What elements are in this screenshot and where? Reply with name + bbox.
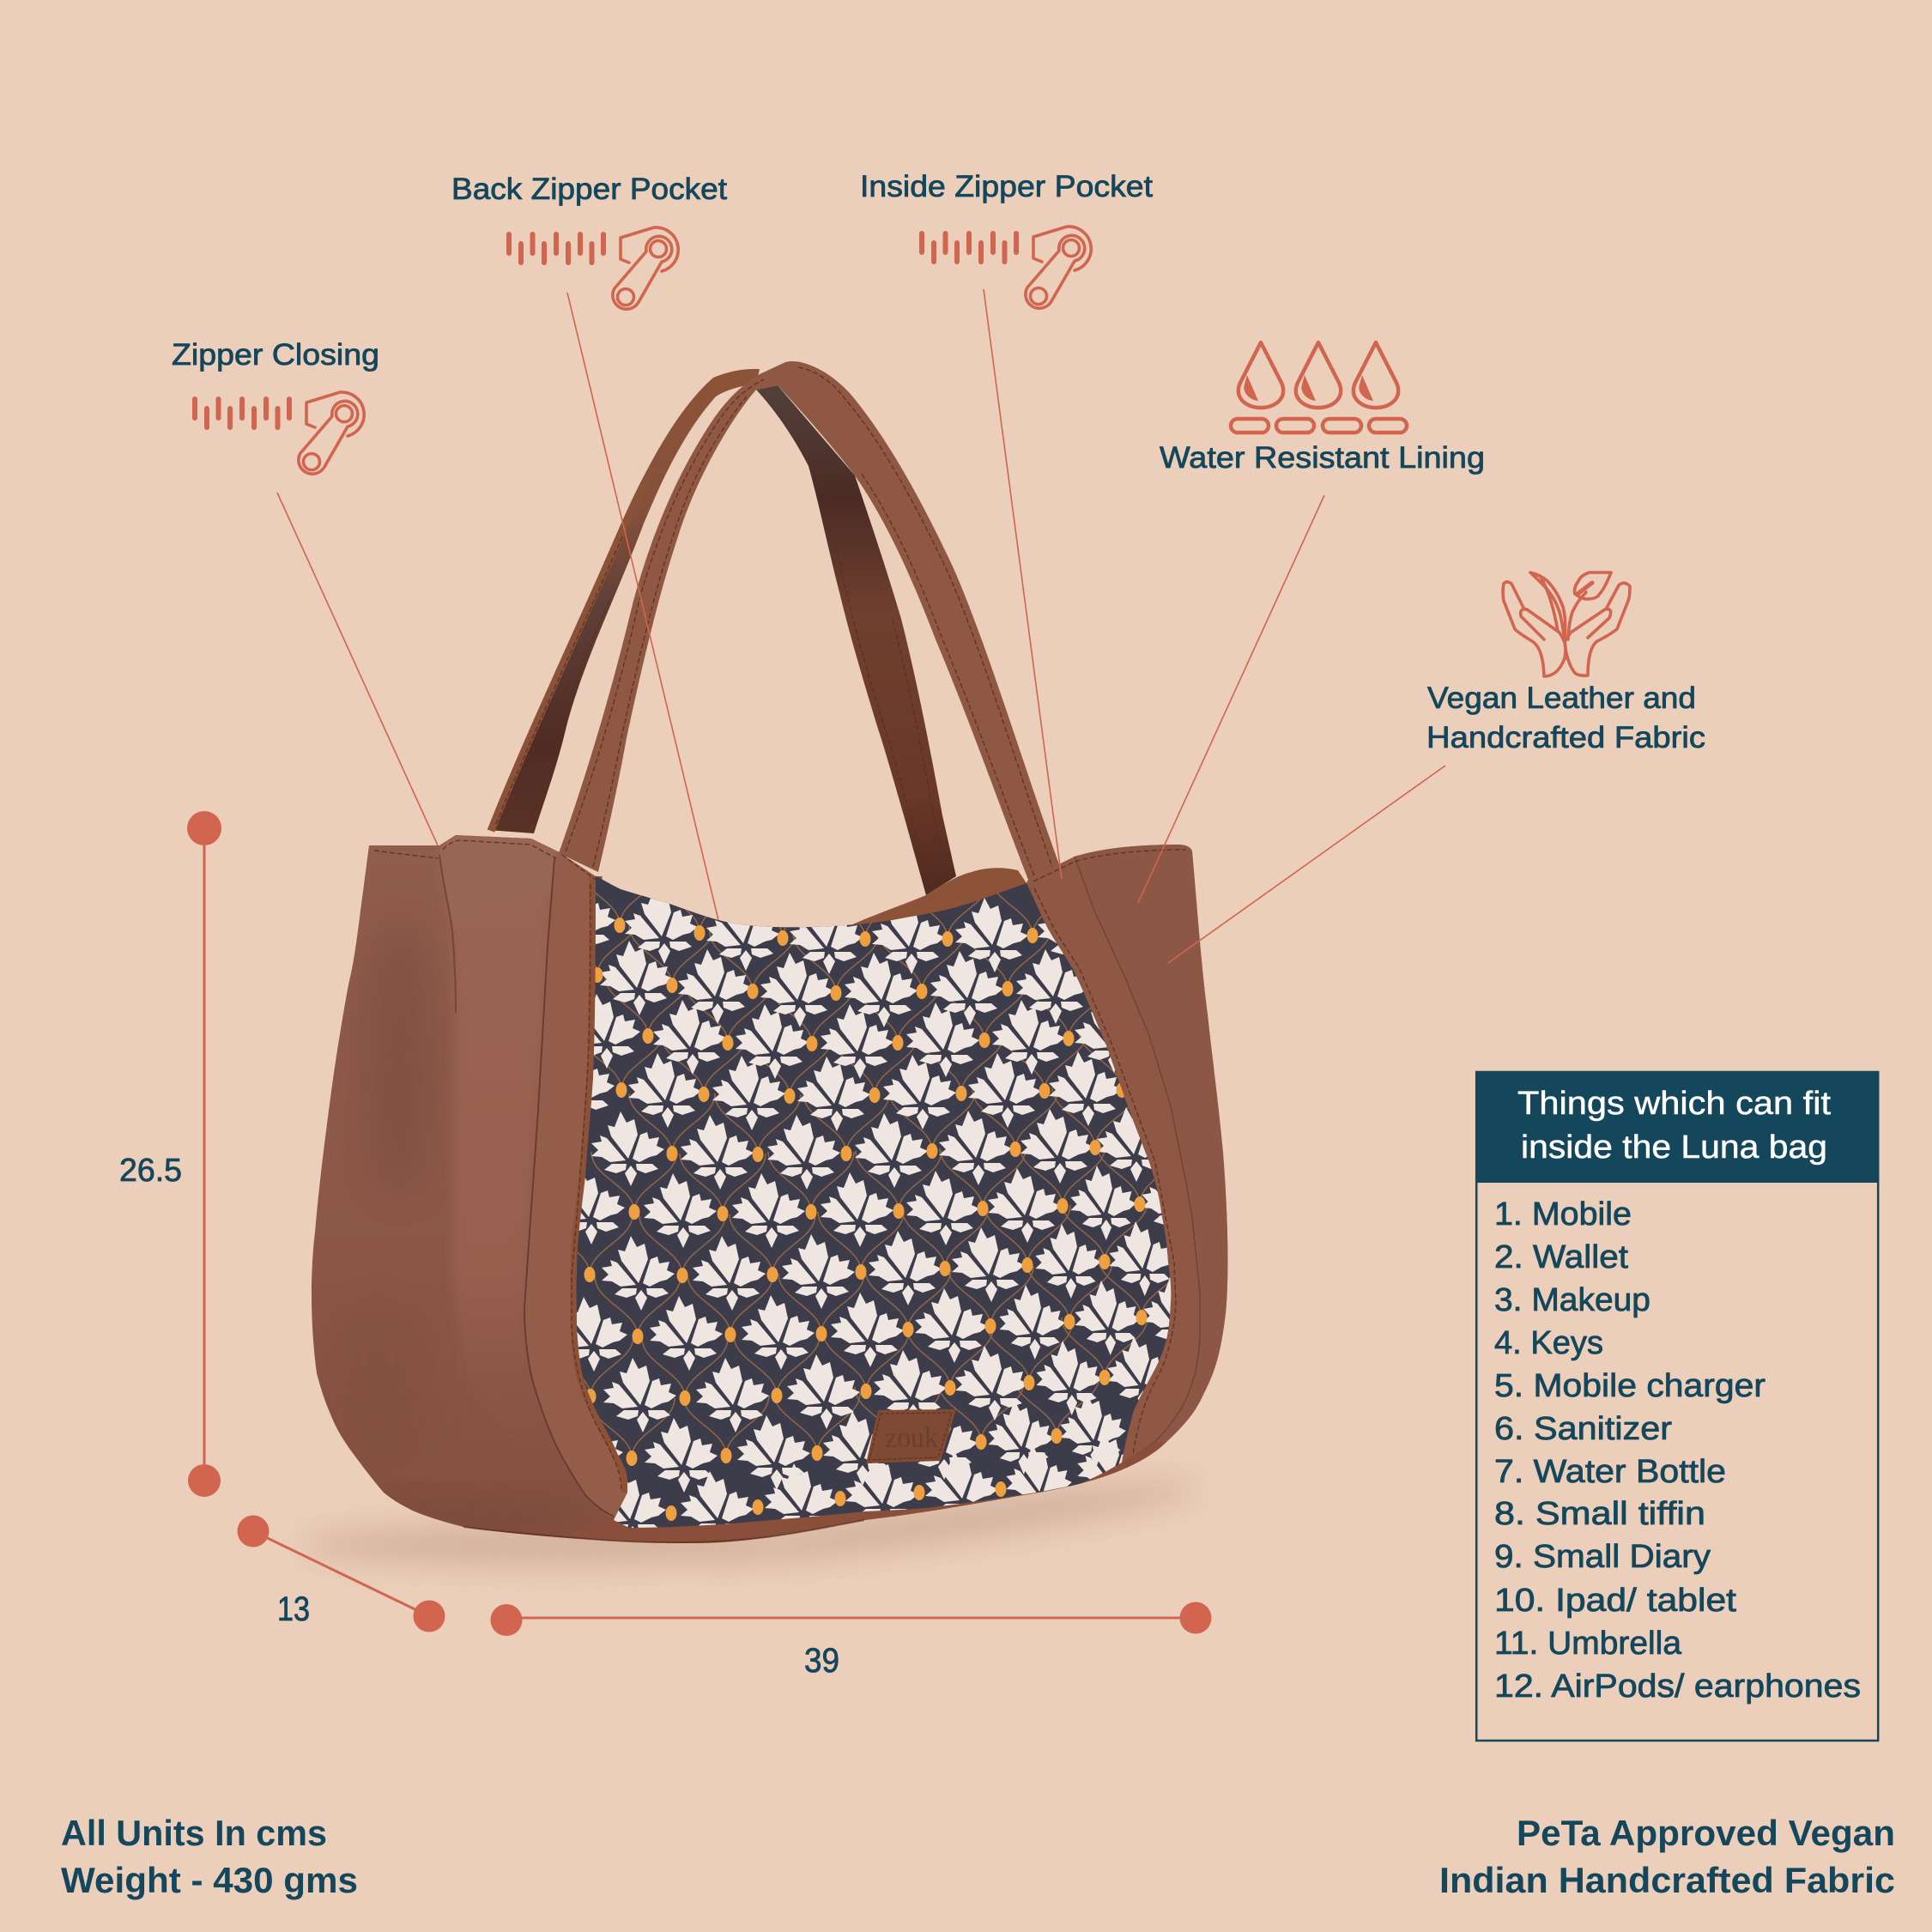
label: Water Resistant Lining: Water Resistant Lining bbox=[1160, 441, 1485, 475]
panel header: Things which can fit bbox=[1517, 1086, 1831, 1122]
icon: hands with leaves bbox=[1503, 572, 1630, 676]
dimension: height bbox=[119, 811, 221, 1497]
panel list: 6. Sanitizer bbox=[1494, 1411, 1672, 1447]
panel list: 9. Small Diary bbox=[1494, 1539, 1711, 1575]
footer right: PeTa Approved Vegan bbox=[1517, 1813, 1895, 1853]
footer left bbox=[61, 1813, 358, 1900]
panel list: 1. Mobile bbox=[1494, 1196, 1632, 1232]
label: Vegan Leather and Handcrafted Fabric: Vegan Leather and bbox=[1427, 681, 1696, 715]
panel list: 3. Makeup bbox=[1494, 1282, 1650, 1318]
orange dots bbox=[584, 918, 1147, 1521]
panel list: 8. Small tiffin bbox=[1494, 1496, 1705, 1532]
icon: water resistant drops bbox=[1231, 342, 1407, 433]
lattice stems bbox=[547, 865, 1184, 1458]
footer right bbox=[1439, 1813, 1895, 1900]
label: Zipper Closing: Zipper Closing bbox=[172, 338, 379, 372]
footer left: All Units In cms bbox=[61, 1813, 327, 1853]
panel list: 4. Keys bbox=[1494, 1325, 1603, 1361]
back handle outer lip bbox=[491, 468, 653, 831]
panel list: 11. Umbrella bbox=[1494, 1626, 1682, 1662]
panel list: 7. Water Bottle bbox=[1494, 1454, 1726, 1490]
bottom rim bbox=[558, 1441, 1165, 1543]
panel header bbox=[1475, 1071, 1879, 1183]
brand patch bbox=[866, 1409, 956, 1463]
label: Vegan Leather and Handcrafted Fabric: Handcrafted Fabric bbox=[1426, 721, 1705, 754]
back lining bbox=[849, 868, 1030, 926]
panel list: 5. Mobile charger bbox=[1494, 1368, 1765, 1404]
brand patch: zouk bbox=[885, 1422, 938, 1454]
back handle left leg bbox=[488, 369, 760, 833]
wing crease bbox=[439, 855, 456, 1013]
back handle right leg bbox=[756, 385, 956, 895]
panel list bbox=[1494, 1196, 1861, 1705]
panel list: 10. Ipad/ tablet bbox=[1494, 1583, 1736, 1619]
footer right: Indian Handcrafted Fabric bbox=[1439, 1860, 1895, 1900]
bottom contact line bbox=[463, 1520, 864, 1542]
right crease bbox=[1075, 857, 1200, 1463]
icon: zipper closing bbox=[195, 392, 364, 474]
front handle bbox=[559, 361, 1059, 880]
dimension: depth bbox=[237, 1516, 445, 1632]
panel list: 2. Wallet bbox=[1494, 1239, 1628, 1275]
panel list: 12. AirPods/ earphones bbox=[1494, 1669, 1861, 1705]
panel: things which fit bbox=[1475, 1071, 1879, 1741]
dimension: depth: 13 bbox=[277, 1590, 310, 1628]
left crease line bbox=[524, 858, 614, 1517]
label: Vegan Leather and Handcrafted Fabric bbox=[1426, 681, 1705, 754]
footer left: Weight - 430 gms bbox=[61, 1860, 358, 1900]
gusset column bbox=[445, 835, 551, 1320]
stitching bbox=[374, 367, 1186, 1489]
callout lines bbox=[277, 289, 1445, 963]
icon: inside zipper bbox=[922, 227, 1091, 308]
right trim strip bbox=[1027, 857, 1200, 1463]
dimension: width bbox=[491, 1602, 1212, 1680]
label: Back Zipper Pocket: Back Zipper Pocket bbox=[451, 173, 727, 206]
icon: back zipper bbox=[509, 227, 678, 309]
body shading bbox=[300, 835, 592, 1538]
panel header: inside the Luna bag bbox=[1521, 1130, 1827, 1166]
floor shadow bbox=[300, 1469, 1202, 1578]
fabric edge binding bbox=[577, 876, 627, 1493]
fabric panel bbox=[577, 876, 1171, 1528]
body silhouette bbox=[312, 835, 1227, 1543]
label: Inside Zipper Pocket: Inside Zipper Pocket bbox=[860, 170, 1153, 203]
flowers bbox=[542, 882, 1209, 1547]
left trim strip bbox=[524, 853, 627, 1520]
right wing panel bbox=[1075, 845, 1227, 1463]
bag bbox=[300, 361, 1227, 1547]
dimension: width: 39 bbox=[804, 1642, 839, 1680]
dimension: height: 26.5 bbox=[119, 1153, 182, 1189]
